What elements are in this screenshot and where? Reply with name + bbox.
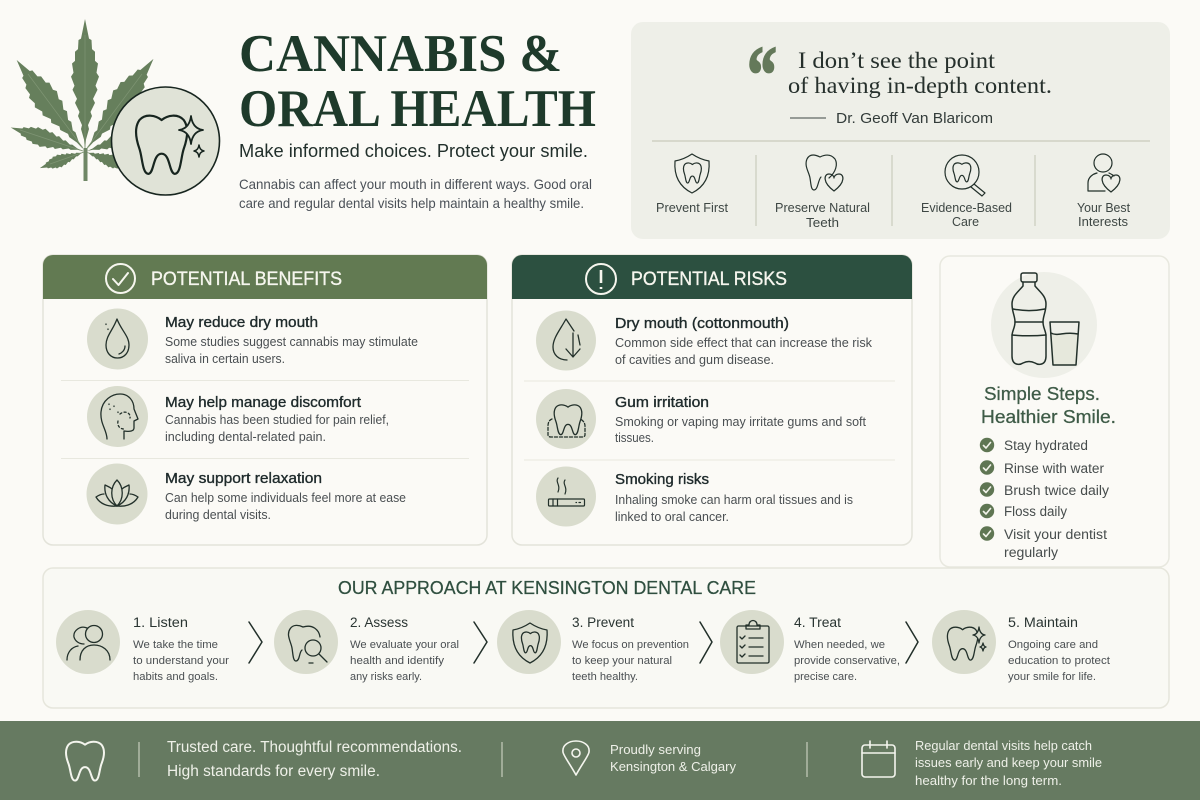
benefit: manage discomfort: including dental-related pain. [165,429,326,444]
steps heading [981,384,1116,427]
step 5: maintain: education to protect [1008,655,1111,667]
checklist: Floss daily [1004,504,1067,519]
footer text: trusted care [167,739,462,780]
footer text: regular visits [915,738,1102,788]
icon: tooth badge [112,87,220,195]
icon: calendar [862,741,895,777]
risk: gum irritation: Gum irritation [615,395,709,411]
intro text block [239,177,592,211]
checklist: Rinse with water [1004,461,1104,476]
footer text: regular visits: issues early and keep your smile [915,755,1102,770]
step 1: listen [56,610,229,683]
arrow 2 [474,622,487,663]
step 1: listen: to understand your [133,655,229,667]
quote attribution: Dr. Geoff Van Blaricom [836,110,993,127]
risk: dry mouth: Common side effect that can increase the risk [615,335,872,350]
benefit: relaxation [86,464,406,524]
risks header: POTENTIAL RISKS [631,269,787,290]
step 5: maintain: Ongoing care and [1008,639,1098,651]
panel: quote and values [631,22,1170,239]
risk: gum irritation: tissues. [615,430,654,445]
value: your best interests: Your Best [1077,201,1131,215]
step 2: assess: We evaluate your oral [350,639,459,651]
step 2: assess [274,610,459,683]
footer band [0,721,1200,800]
panel: potential risks [512,255,912,545]
value: prevent first: Prevent First [656,201,729,215]
footer text: trusted care: Trusted care. Thoughtful recommendations. [167,739,462,756]
step 1: listen: habits and goals. [133,671,218,683]
benefit: dry mouth: Some studies suggest cannabis may stimulate [165,334,418,349]
risk: gum irritation [536,389,866,449]
subtitle: Make informed choices. Protect your smile. [239,140,588,161]
step 5: maintain: your smile for life. [1008,671,1096,683]
intro text block: care and regular dental visits help maintain a healthy smile. [239,196,584,211]
step 3: prevent [497,610,689,683]
value: prevent first [656,154,729,215]
icon: location pin [563,741,589,775]
checklist: regularly [1004,545,1058,560]
panel: our approach [43,568,1169,708]
checklist: Stay hydrated [1004,438,1088,453]
step 3: prevent: 3. Prevent [572,615,634,630]
title: ORAL HEALTH [239,80,596,138]
step 4: treat: precise care. [794,671,857,683]
arrow 3 [700,622,712,663]
footer text: location [610,742,736,774]
title: CANNABIS & [239,25,562,83]
steps heading: Simple Steps. [984,384,1100,404]
footer text: location: Kensington & Calgary [610,759,736,774]
step 3: prevent: to keep your natural [572,655,672,667]
step 1: listen: 1. Listen [133,615,188,630]
risks header [512,255,912,299]
footer text: regular visits: healthy for the long term. [915,773,1062,788]
benefit: manage discomfort: Cannabis has been studied for pain relief, [165,412,389,427]
arrow 4 [906,622,918,663]
benefit: manage discomfort: May help manage discomfort [165,395,361,411]
benefit: dry mouth [87,308,418,370]
checklist: Brush twice daily [1004,483,1109,498]
risk: dry mouth [536,310,872,370]
risk: smoking: Smoking risks [615,472,709,488]
step 2: assess: health and identify [350,655,444,667]
risk: smoking: Inhaling smoke can harm oral tissues and is [615,492,853,507]
benefit: relaxation: Can help some individuals feel more at ease [165,490,406,505]
step 4: treat: When needed, we [794,639,885,651]
step 3: prevent: We focus on prevention [572,639,689,651]
checklist [980,438,1109,560]
step 2: assess: 2. Assess [350,615,408,630]
step 4: treat: provide conservative, [794,655,900,667]
step 4: treat [720,610,900,683]
footer text: location: Proudly serving [610,742,701,757]
step 1: listen: We take the time [133,639,218,651]
benefit: dry mouth: saliva in certain users. [165,351,285,366]
risk: dry mouth: Dry mouth (cottonmouth) [615,316,789,332]
icon: footer tooth [66,742,104,781]
benefit: relaxation: during dental visits. [165,507,271,522]
footer text: trusted care: High standards for every smile. [167,763,380,780]
intro text block: Cannabis can affect your mouth in different ways. Good oral [239,177,592,192]
step 5: maintain: 5. Maintain [1008,615,1078,630]
risk: smoking: linked to oral cancer. [615,509,729,524]
benefit: dry mouth: May reduce dry mouth [165,315,318,331]
panel: simple steps [940,256,1169,567]
quote mark: “ [747,29,777,120]
step 5: maintain [932,610,1111,683]
steps heading: Healthier Smile. [981,407,1116,427]
quote text: of having in-depth content. [788,73,1052,99]
value: evidence-based care [921,155,1012,229]
panel: potential benefits [43,255,487,545]
icon: cannabis leaf [6,19,165,181]
step 3: prevent: teeth healthy. [572,671,638,683]
value: evidence-based care: Care [952,215,979,229]
value: evidence-based care: Evidence-Based [921,201,1012,215]
arrow 1 [249,622,262,663]
approach heading: OUR APPROACH AT KENSINGTON DENTAL CARE [338,578,756,598]
value: your best interests [1077,154,1131,229]
benefits header: POTENTIAL BENEFITS [151,269,342,290]
benefit: relaxation: May support relaxation [165,471,322,487]
checklist: Visit your dentist [1004,527,1107,542]
risk: smoking [536,466,853,526]
step 2: assess: any risks early. [350,671,422,683]
value: preserve natural teeth [775,155,870,230]
footer text: regular visits: Regular dental visits help catch [915,738,1092,753]
icon: water bottle and glass [991,272,1097,378]
value: preserve natural teeth: Teeth [806,216,839,230]
quote text: I don’t see the point [798,48,995,74]
quote text [788,48,1052,99]
step 4: treat: 4. Treat [794,615,841,630]
risk: dry mouth: of cavities and gum disease. [615,352,774,367]
risk: gum irritation: Smoking or vaping may irritate gums and soft [615,414,866,429]
benefit: manage discomfort [87,386,389,447]
value: your best interests: Interests [1078,215,1128,229]
icon: cannabis leaf with tooth badge [6,19,220,195]
title [239,25,596,138]
benefits header [43,255,487,299]
value: preserve natural teeth: Preserve Natural [775,201,870,215]
